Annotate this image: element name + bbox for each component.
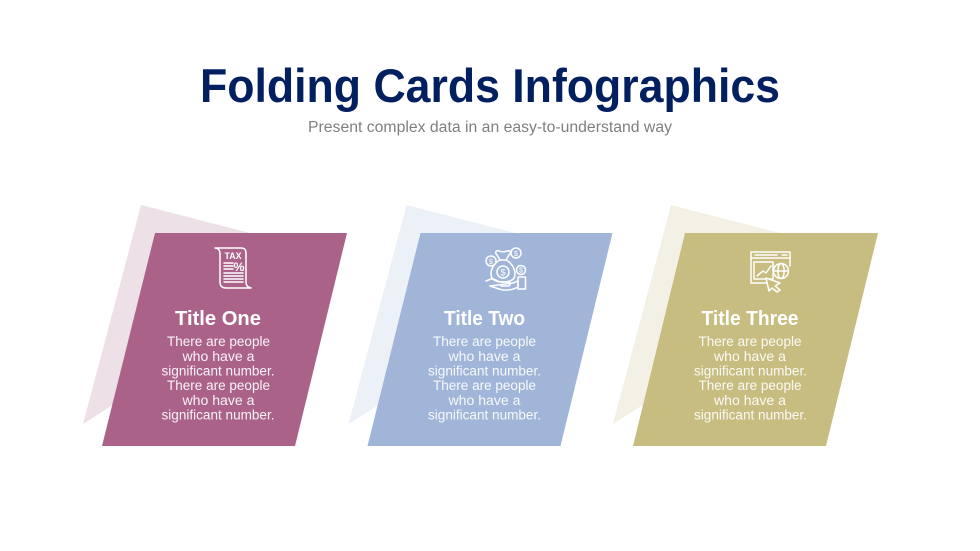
- icon: browser window with chart and cursor: [751, 252, 790, 292]
- front sheet: card three: [633, 233, 878, 446]
- text block: card three body: significant number.: [694, 408, 807, 422]
- heading: title two: Title Two: [444, 307, 525, 330]
- text block: card one body: who have a: [181, 393, 255, 408]
- text block: card two body: There are people: [433, 378, 536, 393]
- text block: card one body: significant number.: [162, 364, 274, 378]
- folded back sheet: card two: [348, 205, 516, 424]
- icon: money bag in hand: $: [489, 259, 493, 266]
- text block: card two body: who have a: [447, 349, 521, 364]
- icon: tax document: TAX: [224, 251, 242, 262]
- icon: money bag in hand: $: [514, 251, 518, 258]
- heading: title one: Title One: [175, 307, 261, 330]
- text block: card one body: There are people: [167, 378, 270, 393]
- text block: card one body: significant number.: [162, 408, 274, 422]
- icon: money bag in hand: [486, 248, 526, 290]
- panel: card one: [83, 205, 347, 446]
- text block: card one body: There are people: [167, 334, 270, 349]
- title: Folding Cards Infographics: [200, 59, 780, 112]
- text block: card three body: [694, 334, 807, 422]
- icon: tax document: [215, 248, 251, 288]
- icon: money bag in hand: $: [500, 268, 506, 278]
- text block: card three body: There are people: [698, 378, 802, 393]
- text block: card two body: significant number.: [428, 364, 541, 378]
- text block: card two body: There are people: [433, 334, 536, 349]
- text block: card one body: who have a: [181, 349, 255, 364]
- text block: card two body: [428, 334, 541, 422]
- text block: card three body: significant number.: [694, 364, 807, 378]
- icon: money bag in hand: $: [519, 268, 523, 274]
- panel: card two: [348, 205, 612, 446]
- front sheet: card one: [102, 233, 347, 446]
- heading: title three: Title Three: [702, 307, 798, 330]
- text block: card three body: There are people: [698, 334, 802, 349]
- text block: card two body: who have a: [447, 393, 521, 408]
- panel: card three: [613, 205, 878, 446]
- text block: card three body: who have a: [713, 393, 786, 408]
- subtitle: Present complex data in an easy-to-understand way: [308, 119, 672, 136]
- front sheet: card two: [368, 233, 612, 446]
- text block: card two body: significant number.: [428, 408, 541, 422]
- icon: tax document: %: [234, 260, 245, 274]
- text block: card three body: who have a: [713, 349, 786, 364]
- folded back sheet: card one: [83, 205, 250, 424]
- folded back sheet: card three: [613, 205, 780, 424]
- text block: card one body: [162, 334, 274, 422]
